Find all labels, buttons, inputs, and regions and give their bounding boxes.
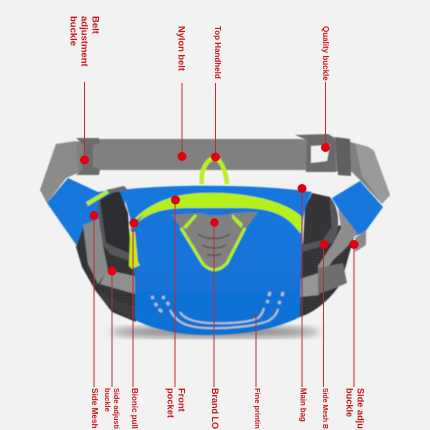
callout: front pocket [166,196,186,418]
callout: top handheld: Top Handheld [213,26,222,79]
callout: belt adjustment buckle [68,16,100,164]
callout: side adjusting buckle right [344,240,366,429]
left side wing [47,178,125,246]
callout: bionic pull head: Bionic pull [130,388,139,429]
left mesh pocket [76,192,136,322]
callout: main bag [298,184,308,422]
callout: side mesh bag right [320,240,328,429]
callout: belt adjustment buckle: buckle [68,16,78,46]
callout: belt adjustment buckle: adjustment [78,16,90,68]
callout: bionic pull head [130,218,139,429]
callout: side mesh bag left [90,211,99,428]
callout: side adjusting buckle left: Side adjusti [112,388,121,429]
callout: fine printing [253,313,262,429]
callout: side adjusting buckle right: buckle [344,388,354,417]
callout: belt adjustment buckle: Belt [90,16,100,35]
callout: quality buckle [321,26,330,152]
belt adjustment loop [76,138,100,175]
main blue body [122,186,312,335]
quality buckle [295,134,351,176]
callout: brand logo: Brand LO [210,388,220,429]
callout: main bag: Main bag [298,388,308,422]
callout: side adjusting buckle right: Side adju [356,388,366,429]
zipper pull [86,186,128,206]
callout: side adjusting buckle left [103,266,121,429]
waist bag [40,134,390,335]
callout: front pocket: pocket [166,388,176,418]
right mesh pocket [300,193,366,317]
top handle [202,158,227,184]
callout: fine printing: Fine printin [253,388,262,429]
callout: side adjusting buckle left: buckle [103,388,112,412]
callout: top handheld [211,26,222,162]
grey logo panel [172,212,258,270]
callout: nylon belt [176,26,186,161]
callout: front pocket: Front [176,388,186,412]
callout: side mesh bag left: Side Mesh [90,388,99,428]
callout: side mesh bag right: Side Mesh B [321,388,328,429]
callout: quality buckle: Quality buckle [321,26,330,81]
right side wing [332,181,383,236]
callout: nylon belt: Nylon belt [176,26,186,71]
nylon belt [40,139,390,204]
callout: brand logo [210,218,220,429]
ground shadow [110,326,320,338]
reflective stripes [152,292,283,328]
neon front pocket trim [128,193,302,269]
